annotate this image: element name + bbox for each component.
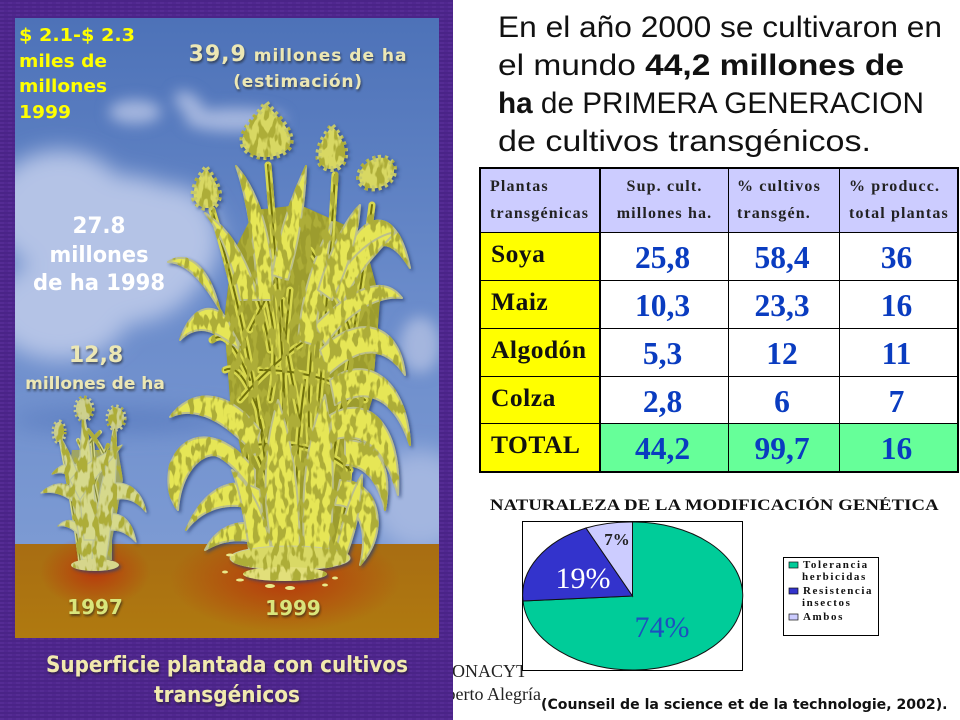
label: 27.8 millones de ha 1998 [33, 214, 165, 296]
purple textured background [0, 0, 453, 720]
soil band [15, 544, 439, 638]
row Soya: 25,8 [635, 240, 690, 275]
row Soya: 58,4 [754, 240, 810, 275]
row Algodon: 12 [766, 336, 798, 371]
legend: Tolerancia herbicidas: herbicidas [802, 571, 867, 583]
row Maiz [481, 281, 957, 328]
soil clump [230, 546, 350, 570]
label: 1999: 1999 [265, 596, 321, 620]
label: 39,9 millones de ha: (estimación) [233, 72, 363, 92]
row TOTAL: 16 [881, 431, 912, 466]
legend: Resistencia insectos [789, 585, 873, 609]
heading text [498, 11, 942, 158]
label: 12,8 millones de ha: millones de ha [25, 374, 165, 394]
illustration title: transgénicos [154, 683, 300, 708]
slice 74%: 74% [634, 611, 690, 644]
pie chart legend [783, 557, 879, 636]
row Colza: 2,8 [643, 384, 682, 419]
legend: Tolerancia herbicidas [789, 559, 869, 583]
row Maiz: 10,3 [635, 288, 690, 323]
row Colza: 6 [774, 384, 790, 419]
header row: total plantas [849, 205, 949, 222]
legend: Resistencia insectos: insectos [802, 597, 851, 609]
header row: % cultivos [737, 178, 821, 195]
source citation: (Counseil de la science et de la technologie, 2002). [541, 697, 948, 713]
row TOTAL [481, 424, 957, 471]
label: 39,9 millones de ha [189, 42, 407, 92]
plant 1999 large [168, 103, 410, 581]
label: 27.8 millones de ha 1998: de ha 1998 [33, 271, 165, 296]
row Soya: Soya [491, 239, 545, 268]
heading text: En el año 2000 se cultivaron en [498, 11, 942, 44]
legend: Tolerancia herbicidas: Tolerancia [803, 559, 869, 571]
row Algodon: Algodón [491, 335, 587, 364]
label: 12,8 millones de ha [25, 343, 165, 394]
slice 19%: 19% [556, 562, 610, 595]
footer credit CONACYT [453, 661, 541, 704]
soil seeds [222, 554, 338, 590]
tassels [194, 103, 394, 208]
illustration title: Superficie plantada con cultivos [46, 653, 408, 678]
label: 1997: 1997 [67, 595, 123, 619]
header row: millones ha. [617, 205, 712, 222]
header row: Sup. cult. [627, 178, 702, 195]
label: value in dollars 1999: 1999 [19, 102, 71, 123]
row Maiz: 16 [881, 288, 912, 323]
legend: Ambos: Ambos [803, 611, 844, 623]
row TOTAL: 99,7 [754, 431, 810, 466]
header row: Plantas [490, 178, 549, 195]
legend: Resistencia insectos: Resistencia [803, 585, 873, 597]
slice 74% [523, 522, 743, 670]
header row: transgénicas [490, 205, 589, 222]
row Soya [481, 233, 957, 280]
header row: transgén. [737, 205, 811, 222]
label: 27.8 millones de ha 1998: 27.8 [72, 214, 126, 239]
row Maiz: 23,3 [754, 288, 810, 323]
sky with clouds [0, 18, 470, 550]
row Colza [481, 377, 957, 423]
slice 19% [523, 528, 632, 601]
row Algodon: 11 [882, 336, 911, 371]
label: value in dollars 1999: millones [19, 76, 107, 97]
header row [481, 169, 957, 232]
heading text: de cultivos transgénicos. [498, 125, 871, 158]
heading text: ha de PRIMERA GENERACION [498, 87, 924, 120]
row Maiz: Maiz [491, 287, 548, 316]
panel: crop photo illustration [0, 0, 453, 720]
label: value in dollars 1999: $ 2.1-$ 2.3 [19, 25, 135, 46]
row TOTAL: TOTAL [491, 430, 580, 459]
row Algodon: 5,3 [643, 336, 682, 371]
row Colza: 7 [889, 384, 904, 419]
row Algodon [481, 329, 957, 376]
plant 1997 small [41, 398, 146, 571]
illustration title [46, 653, 408, 708]
label: 27.8 millones de ha 1998: millones [50, 243, 148, 268]
table: transgenic plants [479, 167, 959, 473]
pie chart heading: NATURALEZA DE LA MODIFICACIÓN GENÉTICA [490, 497, 939, 514]
row Colza: Colza [491, 383, 556, 412]
row Soya: 36 [881, 240, 912, 275]
pie chart [522, 521, 744, 671]
label: 39,9 millones de ha: 39,9 millones de ha [189, 42, 407, 67]
heading text: el mundo 44,2 millones de [498, 49, 904, 82]
header row: % producc. [849, 178, 940, 195]
label: value in dollars 1999 [19, 25, 135, 123]
label: value in dollars 1999: miles de [19, 51, 107, 72]
slice 7%: 7% [604, 530, 630, 549]
label: 12,8 millones de ha: 12,8 [69, 343, 123, 368]
row TOTAL: 44,2 [635, 431, 690, 466]
slice 7% [586, 522, 632, 596]
